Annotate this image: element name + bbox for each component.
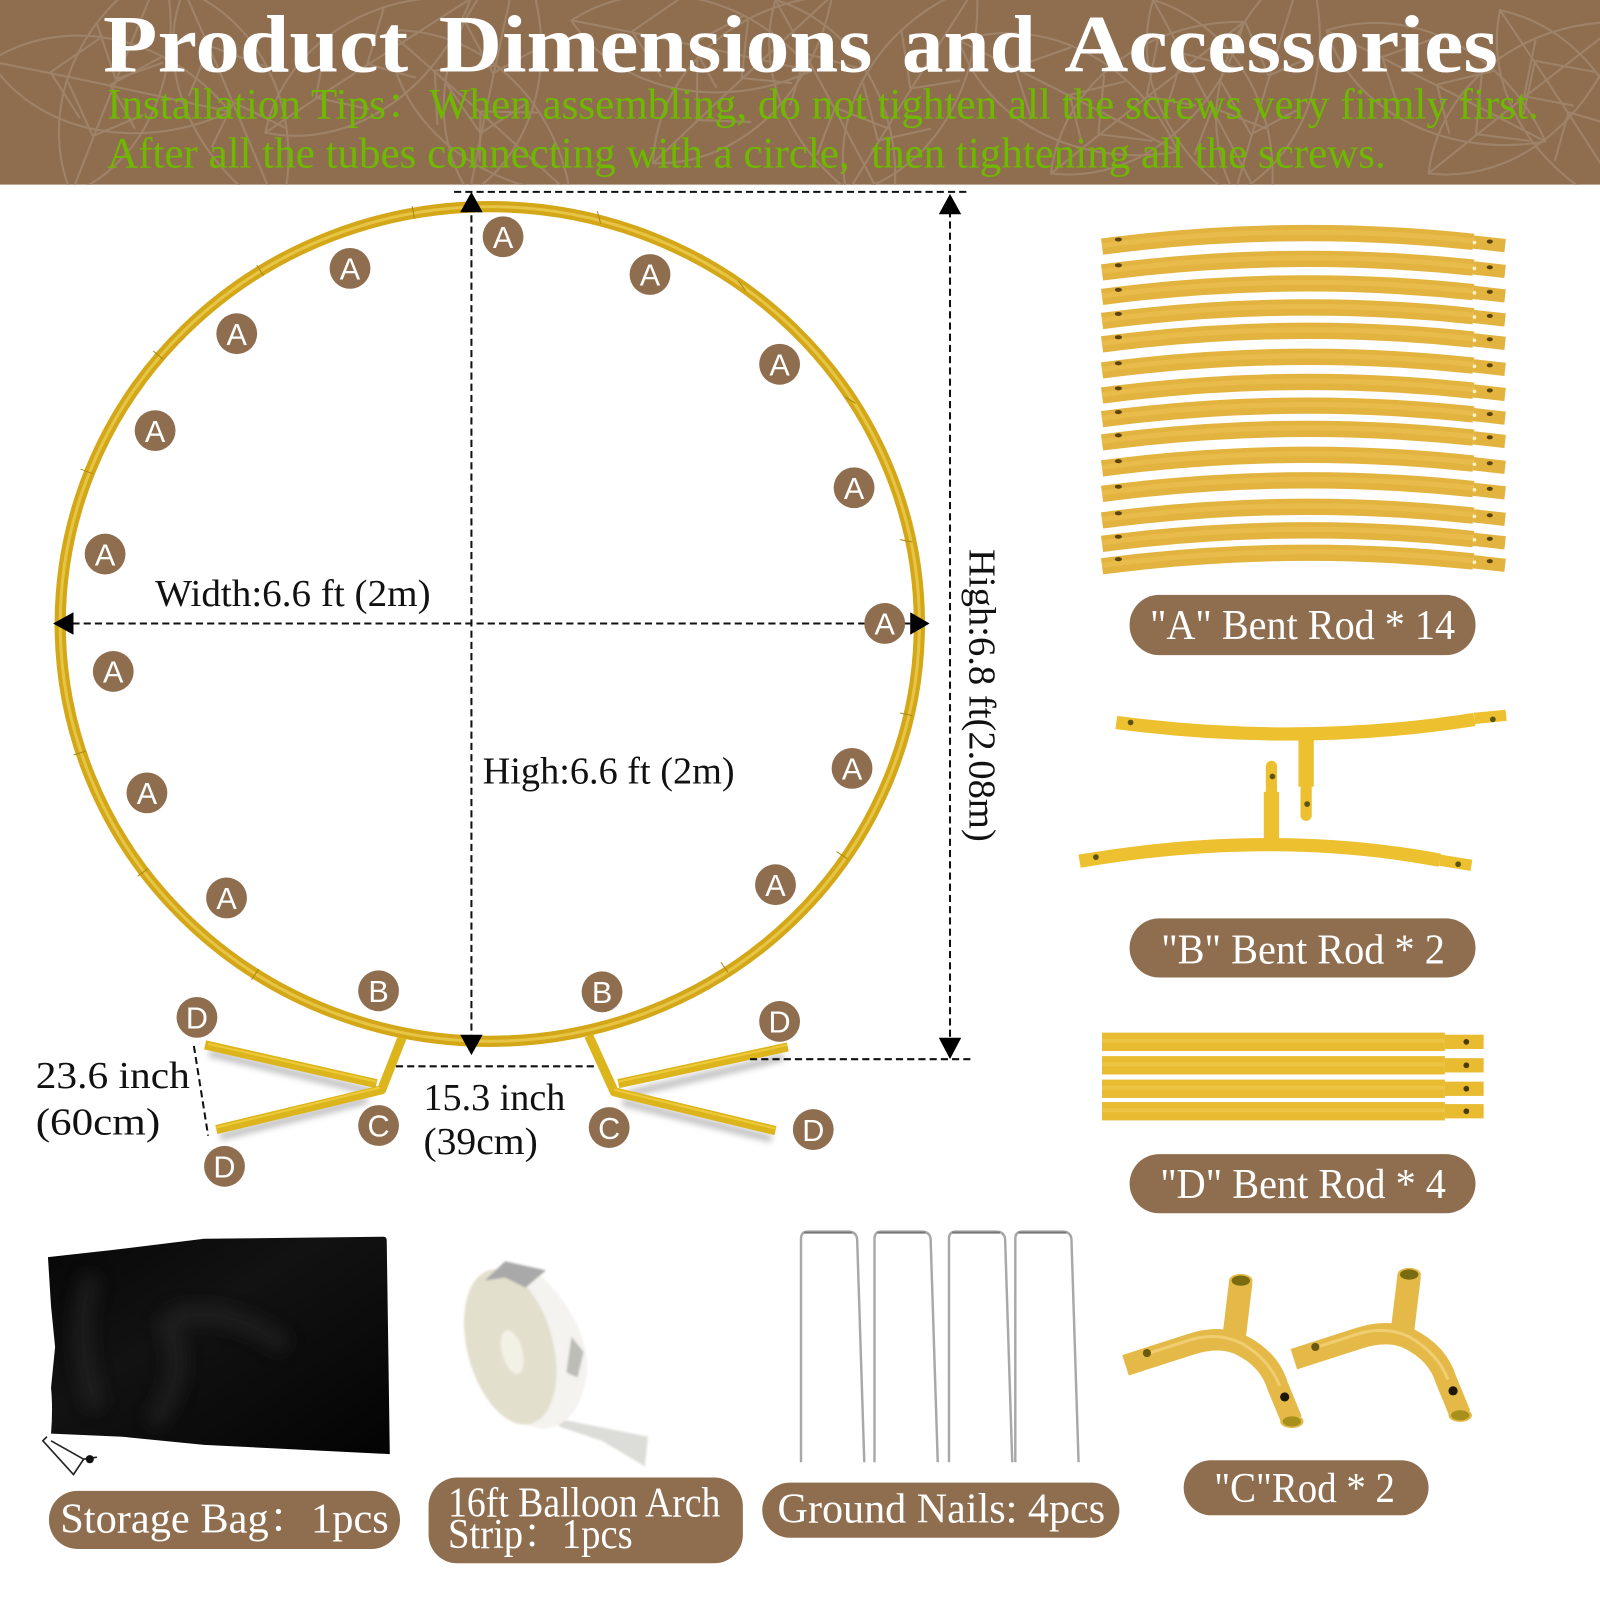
- part badges: A: [95, 538, 116, 572]
- part badges: A: [103, 656, 124, 690]
- title: [103, 0, 1498, 89]
- part badges: B: [592, 976, 612, 1010]
- part badges: A: [844, 472, 865, 506]
- dimension labels: [36, 549, 1002, 1163]
- D bent rods: [1102, 1033, 1484, 1120]
- label: C rod: "C"Rod * 2: [1214, 1466, 1395, 1512]
- base legs: [205, 1036, 788, 1139]
- part badges: A: [769, 349, 790, 383]
- label: balloon arch strip: [429, 1478, 743, 1563]
- part badges: A: [216, 882, 237, 916]
- installation tips: Installation Tips：When assembling, do not tighten all the screws very firmly first.: [107, 81, 1539, 128]
- part badges: A: [765, 869, 786, 903]
- part badges: A: [340, 253, 361, 287]
- part badges: D: [769, 1006, 791, 1040]
- dimension lines and arrows: [53, 192, 974, 1136]
- label: ground nails: Ground Nails: 4pcs: [778, 1486, 1105, 1532]
- header banner: [0, 0, 1600, 185]
- A bent rods: [1102, 232, 1505, 566]
- dimension labels: Width:6.6 ft (2m): [155, 573, 431, 615]
- part badges: D: [186, 1002, 208, 1036]
- dimension labels: High:6.6 ft (2m): [483, 751, 735, 793]
- part badges: A: [145, 415, 166, 449]
- part badges: A: [493, 221, 514, 255]
- label: storage bag: Storage Bag：1pcs: [60, 1497, 389, 1543]
- title: Accessories: [1064, 0, 1498, 89]
- label: balloon arch strip: 16ft Balloon Arch: [448, 1480, 720, 1526]
- part badges: [85, 216, 905, 1187]
- part badges: A: [137, 777, 158, 811]
- dimension labels: (39cm): [423, 1121, 538, 1163]
- part badges: D: [213, 1151, 236, 1185]
- part badges: A: [227, 318, 248, 352]
- label: D bent rod: [1130, 1154, 1476, 1213]
- part badges: D: [802, 1114, 824, 1148]
- storage bag: [43, 1237, 390, 1474]
- label: B bent rod: [1130, 918, 1476, 978]
- label: D bent rod: "D" Bent Rod * 4: [1160, 1162, 1446, 1208]
- arch ring: [60, 206, 919, 1041]
- title: Dimensions: [439, 0, 872, 89]
- part badges: B: [368, 975, 389, 1009]
- part badges: A: [842, 753, 863, 787]
- title: and: [902, 0, 1036, 89]
- balloon arch strip roll: [448, 1259, 648, 1466]
- part badges: A: [874, 608, 895, 642]
- dimension labels: (60cm): [36, 1102, 160, 1144]
- part badges: C: [598, 1112, 620, 1146]
- installation tips: After all the tubes connecting with a circle, then tightening all the screws.: [107, 130, 1386, 177]
- part badges: C: [368, 1110, 390, 1144]
- title: Product: [103, 0, 408, 89]
- C connector rods: [1126, 1268, 1472, 1428]
- dimension labels: High:6.8 ft(2.08m): [960, 549, 1002, 842]
- ground nails: [801, 1232, 1079, 1462]
- B bent rods: [1080, 715, 1506, 867]
- dimension labels: 23.6 inch: [36, 1055, 190, 1097]
- label: C rod: [1184, 1460, 1429, 1515]
- installation tips: [107, 81, 1539, 177]
- label: B bent rod: "B" Bent Rod * 2: [1161, 927, 1445, 973]
- dimension labels: 15.3 inch: [423, 1077, 565, 1119]
- label: A bent rod: "A" Bent Rod * 14: [1150, 603, 1455, 649]
- label: balloon arch strip: Strip：1pcs: [448, 1512, 633, 1558]
- part badges: A: [640, 259, 661, 293]
